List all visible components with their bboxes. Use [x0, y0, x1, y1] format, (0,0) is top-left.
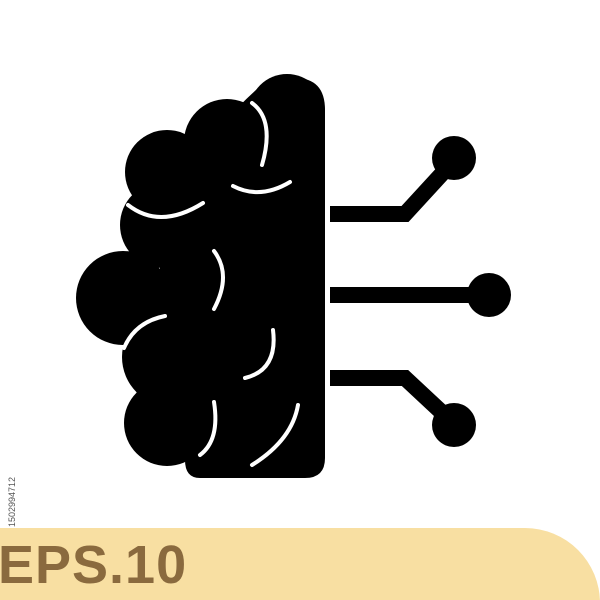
circuits: [330, 165, 485, 420]
banner: EPS.10: [0, 528, 600, 600]
side id text: 1502994712: [7, 477, 17, 527]
banner text: EPS.10: [0, 535, 187, 595]
brain silhouette: [76, 74, 325, 478]
brain fold lines: [124, 103, 298, 465]
